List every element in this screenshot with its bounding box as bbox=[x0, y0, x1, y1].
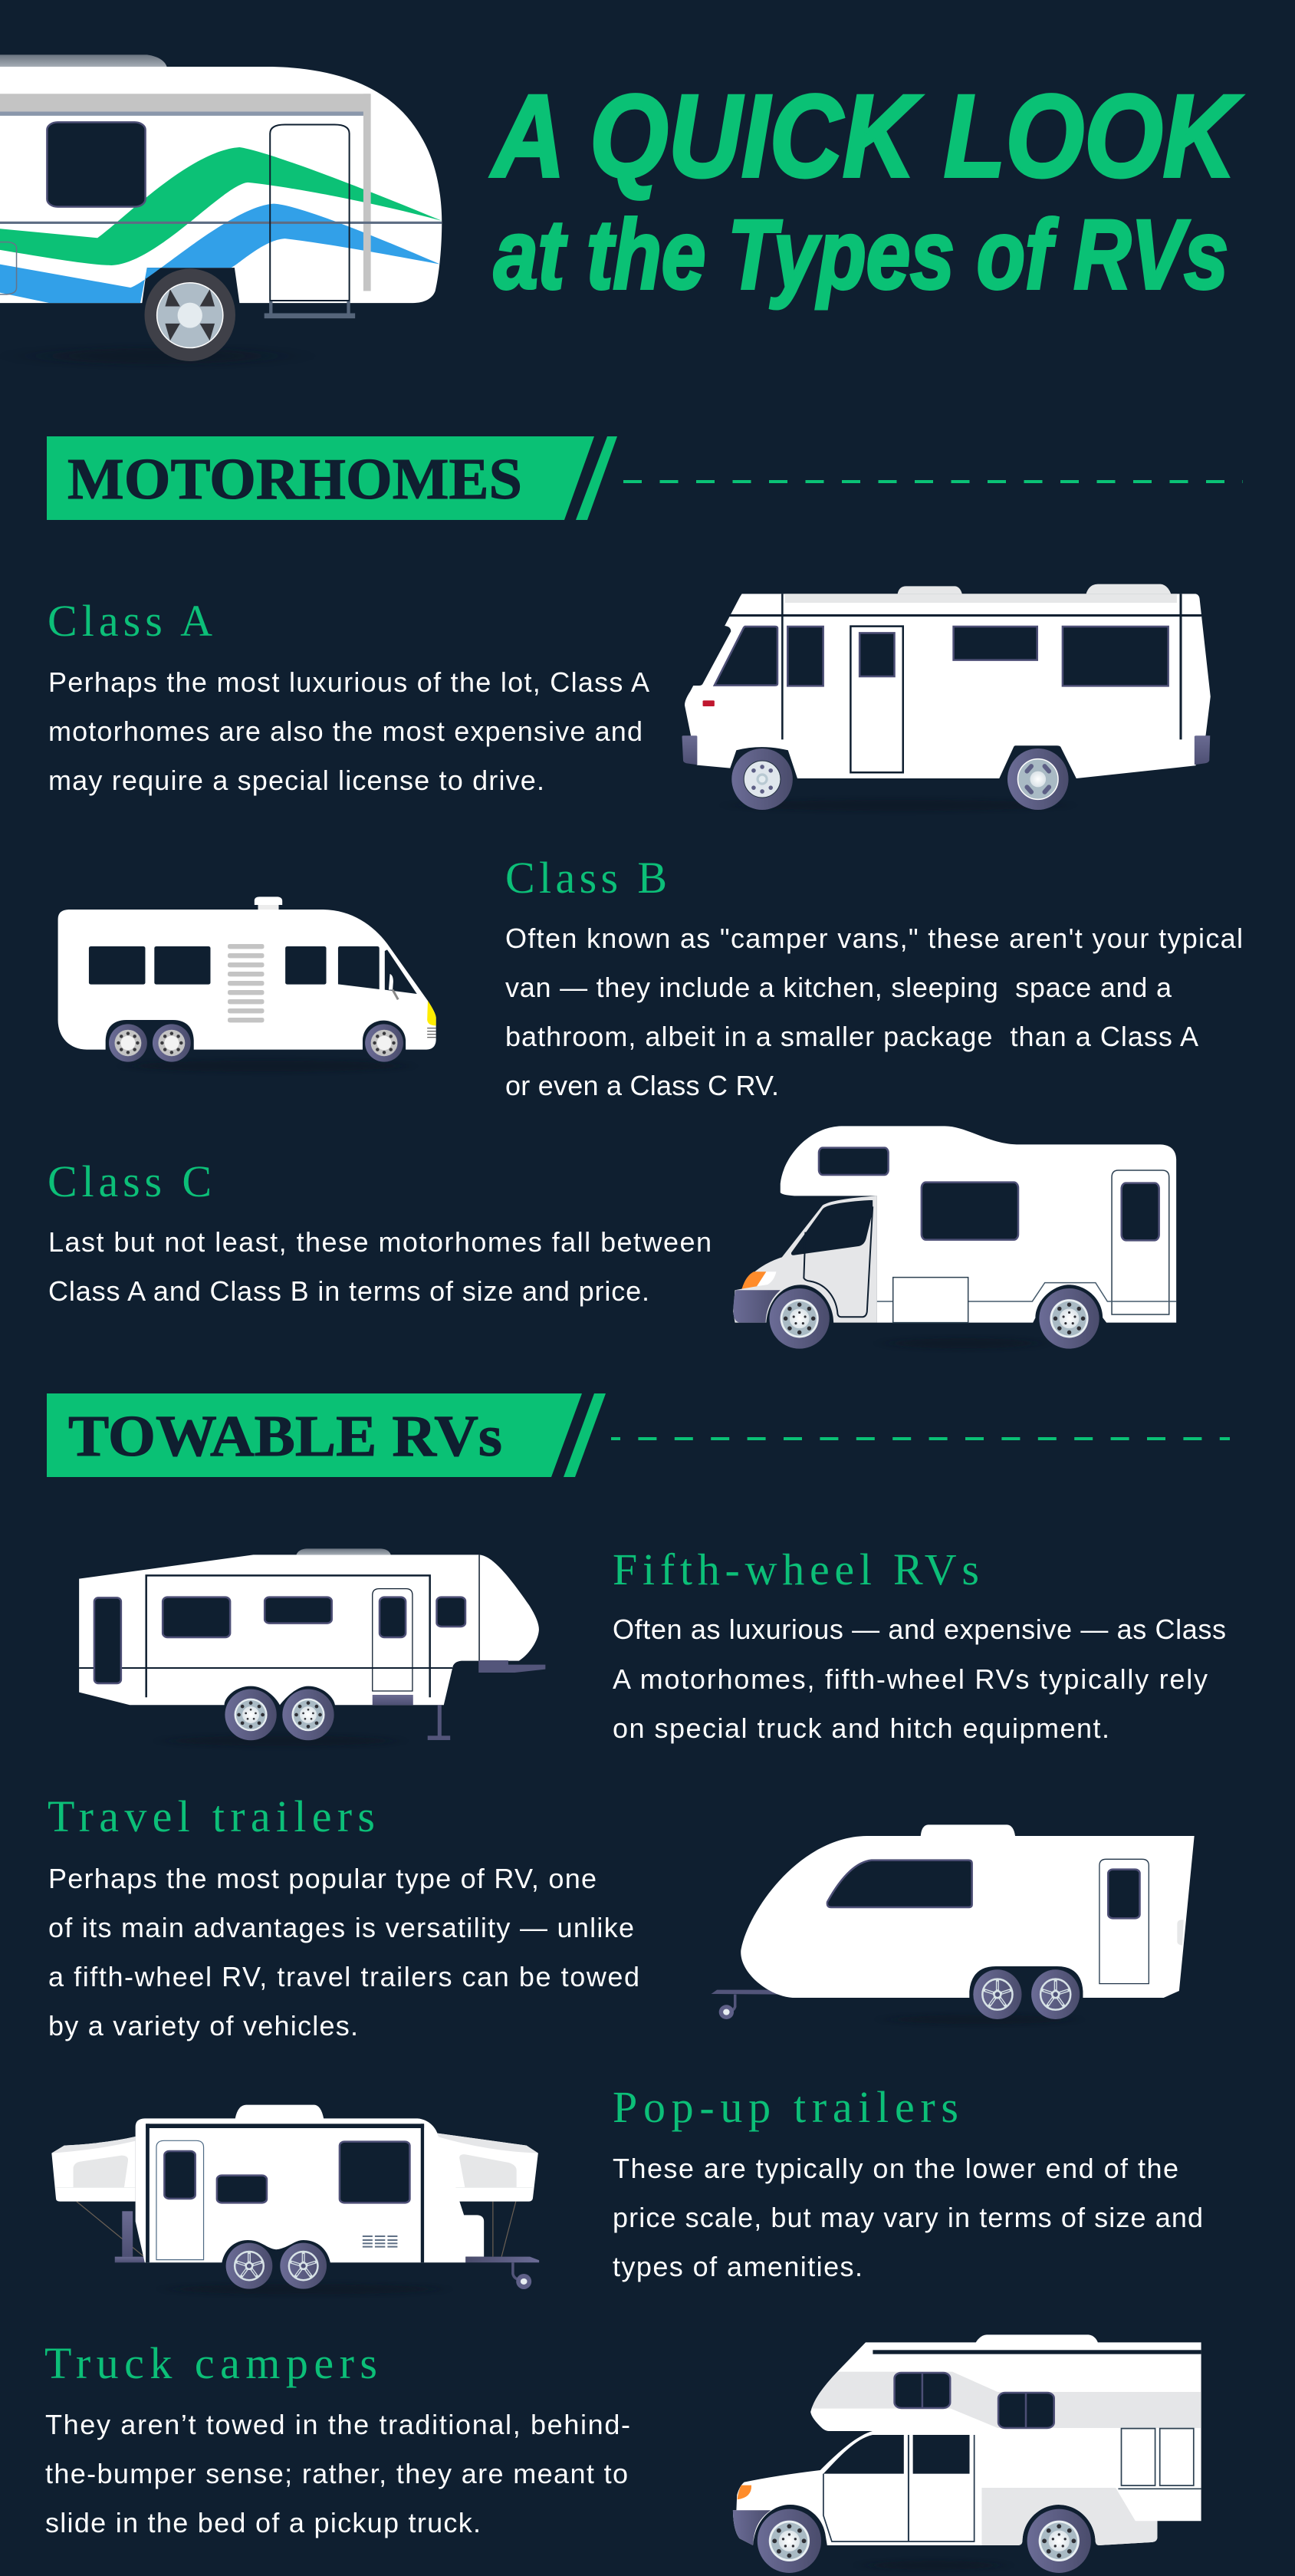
class A marker light bbox=[703, 700, 715, 706]
fifth-wheel windows bbox=[94, 1597, 465, 1683]
travel trailer wheels bbox=[973, 1969, 1080, 2019]
pop-up tongue and jack bbox=[465, 2257, 539, 2289]
class B wheels bbox=[109, 1024, 403, 1062]
truck camper body bbox=[733, 2334, 1201, 2545]
illustration: Truck camper bbox=[733, 2334, 1201, 2573]
travel trailer door bbox=[1099, 1859, 1149, 1984]
class C cab bbox=[733, 1196, 877, 1323]
hero blue swoosh bbox=[0, 204, 440, 303]
class A cab window bbox=[715, 627, 777, 686]
pop-up door bbox=[156, 2140, 204, 2260]
text block: Fifth-wheel RVs: Fifth-wheel RVs bbox=[613, 1545, 979, 1594]
illustration: Travel trailer bbox=[712, 1824, 1195, 2024]
fifth-wheel hitch bbox=[478, 1660, 545, 1673]
title bbox=[490, 71, 1242, 310]
class C door bbox=[1112, 1170, 1169, 1314]
text block: Class B: bathroom, albeit in a smaller package than a Class A bbox=[505, 1021, 1198, 1052]
hero door bbox=[270, 124, 350, 301]
hero green swoosh bbox=[0, 147, 442, 265]
text block: Class A: motorhomes are also the most expensive and bbox=[48, 716, 643, 747]
text block: Class C: Last but not least, these motorhomes fall between bbox=[48, 1226, 712, 1258]
text block: Truck campers: the-bumper sense; rather, they are meant to bbox=[45, 2458, 628, 2489]
class A shadow bbox=[742, 800, 1055, 811]
pop-up frame bbox=[146, 2124, 424, 2262]
class A door window bbox=[859, 633, 895, 676]
text block: Class B: Often known as "camper vans," these aren't your typical bbox=[505, 923, 1243, 954]
class C body bbox=[781, 1126, 1176, 1323]
section heading: motorhomes bbox=[47, 436, 1243, 520]
truck camper windows bbox=[895, 2373, 1054, 2428]
pop-up body bbox=[136, 2105, 484, 2262]
truck wheels bbox=[758, 2509, 1091, 2573]
truck camper lower grey panel bbox=[981, 2488, 1157, 2545]
hero wheel bbox=[144, 268, 235, 361]
truck cab windows bbox=[823, 2435, 970, 2474]
text block: Fifth-wheel RVs: A motorhomes, fifth-wheel RVs typically rely bbox=[613, 1663, 1208, 1695]
text block: Class B bbox=[505, 853, 1243, 1101]
class B mirror bbox=[389, 974, 398, 999]
hero steps bbox=[265, 301, 355, 318]
class A stripes bbox=[729, 594, 1201, 739]
class C windows bbox=[819, 1148, 1159, 1240]
hero body bbox=[0, 67, 442, 303]
text block: Class A bbox=[48, 596, 649, 796]
text block: Pop-up trailers: types of amenities. bbox=[613, 2251, 863, 2282]
text block: Class C: Class C bbox=[48, 1156, 212, 1206]
class C headlight bbox=[742, 1272, 776, 1289]
class B shadow bbox=[133, 1061, 400, 1071]
text block: Class B: Class B bbox=[505, 853, 667, 903]
fifth-wheel shadow bbox=[171, 1735, 390, 1746]
class C door outline bbox=[804, 1206, 873, 1317]
text block: Fifth-wheel RVs: Often as luxurious — and expensive — as Class bbox=[613, 1614, 1226, 1645]
truck camper stripe bbox=[873, 2350, 1201, 2354]
text block: Class C bbox=[48, 1156, 712, 1307]
class C shadow bbox=[892, 1338, 1035, 1348]
text block: Travel trailers bbox=[48, 1791, 639, 2041]
text block: Truck campers bbox=[44, 2338, 630, 2538]
pop-up wheels bbox=[226, 2243, 327, 2289]
class B side vents bbox=[228, 944, 264, 1022]
pop-up left leg bbox=[115, 2211, 145, 2262]
travel trailer shadow bbox=[892, 2015, 1067, 2024]
text block: Truck campers: slide in the bed of a pickup truck. bbox=[45, 2507, 481, 2538]
text block: Travel trailers: a fifth-wheel RV, travel trailers can be towed bbox=[48, 1961, 639, 1992]
hero roof unit bbox=[0, 54, 167, 67]
fifth-wheel frame lines bbox=[79, 1554, 479, 1697]
text block: Class A: Class A bbox=[48, 596, 212, 646]
class C storage box bbox=[893, 1278, 968, 1323]
text block: Class B: or even a Class C RV. bbox=[505, 1070, 779, 1101]
class C side line bbox=[877, 1283, 1176, 1301]
class A body bbox=[685, 594, 1211, 778]
class A windshield bbox=[693, 626, 731, 686]
text block: Truck campers: They aren’t towed in the traditional, behind- bbox=[45, 2409, 630, 2440]
motorhomes label: MOTORHOMES bbox=[67, 447, 522, 512]
text block: Travel trailers: Travel trailers bbox=[48, 1791, 375, 1841]
class A windows bbox=[787, 627, 1168, 686]
pop-up windows bbox=[164, 2142, 409, 2203]
class C bumper bbox=[734, 1290, 781, 1323]
class B vent bbox=[255, 897, 282, 910]
truck headlight bbox=[738, 2486, 751, 2499]
text block: Pop-up trailers: These are typically on the lower end of the bbox=[613, 2153, 1178, 2184]
text block: Fifth-wheel RVs bbox=[613, 1545, 1226, 1744]
illustration: Pop-up trailer bbox=[51, 2105, 539, 2295]
travel trailer body bbox=[741, 1824, 1195, 1998]
hero side hatch bbox=[0, 242, 17, 294]
class A door bbox=[850, 627, 903, 772]
hero belt line bbox=[0, 222, 442, 224]
fifth-wheel door bbox=[373, 1589, 412, 1691]
class B windows bbox=[89, 946, 417, 994]
class C cab window bbox=[791, 1200, 873, 1255]
towable banner bbox=[47, 1393, 582, 1477]
class A bumpers bbox=[682, 735, 1210, 765]
text block: Class A: Perhaps the most luxurious of the lot, Class A bbox=[48, 666, 649, 698]
text block: Pop-up trailers: price scale, but may vary in terms of size and bbox=[613, 2202, 1203, 2233]
travel trailer door window bbox=[1108, 1870, 1140, 1918]
truck camper grey band bbox=[812, 2372, 1201, 2428]
text block: Class B: van — they include a kitchen, sleeping space and a bbox=[505, 972, 1172, 1003]
class B headlight bbox=[427, 1001, 436, 1025]
motorhomes slash bbox=[576, 436, 617, 520]
text block: Truck campers: Truck campers bbox=[44, 2338, 377, 2388]
travel trailer rear detail bbox=[1177, 1920, 1184, 1946]
section heading: towable RVs bbox=[47, 1393, 1230, 1477]
class A roof strip bbox=[785, 594, 1177, 603]
hero awning bbox=[0, 94, 371, 291]
pop-up shadow bbox=[175, 2284, 434, 2295]
truck camper shadow bbox=[871, 2561, 996, 2570]
text block: Pop-up trailers: Pop-up trailers bbox=[613, 2082, 958, 2132]
motorhomes banner bbox=[47, 436, 594, 520]
class C wheels bbox=[769, 1288, 1099, 1349]
class A roof vents bbox=[898, 584, 1171, 594]
class A wheels bbox=[731, 748, 1069, 810]
class B body bbox=[58, 910, 436, 1050]
illustration: Class A motorhome bbox=[682, 584, 1211, 811]
travel trailer window bbox=[827, 1860, 972, 1907]
truck camper side hatches bbox=[1118, 2429, 1201, 2489]
hero window bbox=[47, 122, 146, 207]
illustration: Class C motorhome bbox=[733, 1126, 1176, 1349]
text block: Fifth-wheel RVs: on special truck and hitch equipment. bbox=[613, 1712, 1109, 1744]
fifth-wheel step bbox=[373, 1695, 413, 1705]
pop-up wires bbox=[77, 2202, 516, 2257]
towable slash bbox=[564, 1393, 606, 1477]
text block: Class A: may require a special license to drive. bbox=[48, 765, 544, 796]
text block: Travel trailers: by a variety of vehicles. bbox=[48, 2010, 358, 2041]
illustration: Fifth-wheel RV bbox=[79, 1548, 545, 1746]
text block: Pop-up trailers bbox=[613, 2082, 1203, 2282]
text block: Travel trailers: Perhaps the most popular type of RV, one bbox=[48, 1863, 597, 1894]
pop-up right wing bbox=[437, 2134, 538, 2202]
illustration: Class B van bbox=[58, 897, 436, 1071]
truck cab doors bbox=[823, 2435, 975, 2541]
hero shadow bbox=[50, 348, 265, 364]
text block: Class C: Class A and Class B in terms of size and price. bbox=[48, 1275, 649, 1307]
towable label: TOWABLE RVs bbox=[68, 1404, 502, 1469]
illustration: hero RV bbox=[0, 54, 442, 364]
truck bumper bbox=[733, 2510, 771, 2545]
pop-up vent bbox=[363, 2235, 397, 2248]
text block: Travel trailers: of its main advantages is versatility — unlike bbox=[48, 1912, 634, 1943]
pop-up left wing bbox=[51, 2137, 136, 2202]
class B grille bbox=[427, 1028, 436, 1038]
travel trailer hitch bbox=[712, 1990, 783, 2019]
fifth-wheel body bbox=[79, 1554, 539, 1705]
fifth-wheel wheels bbox=[225, 1689, 334, 1740]
fifth-wheel landing leg bbox=[428, 1705, 450, 1740]
fifth-wheel roof unit bbox=[296, 1548, 391, 1554]
